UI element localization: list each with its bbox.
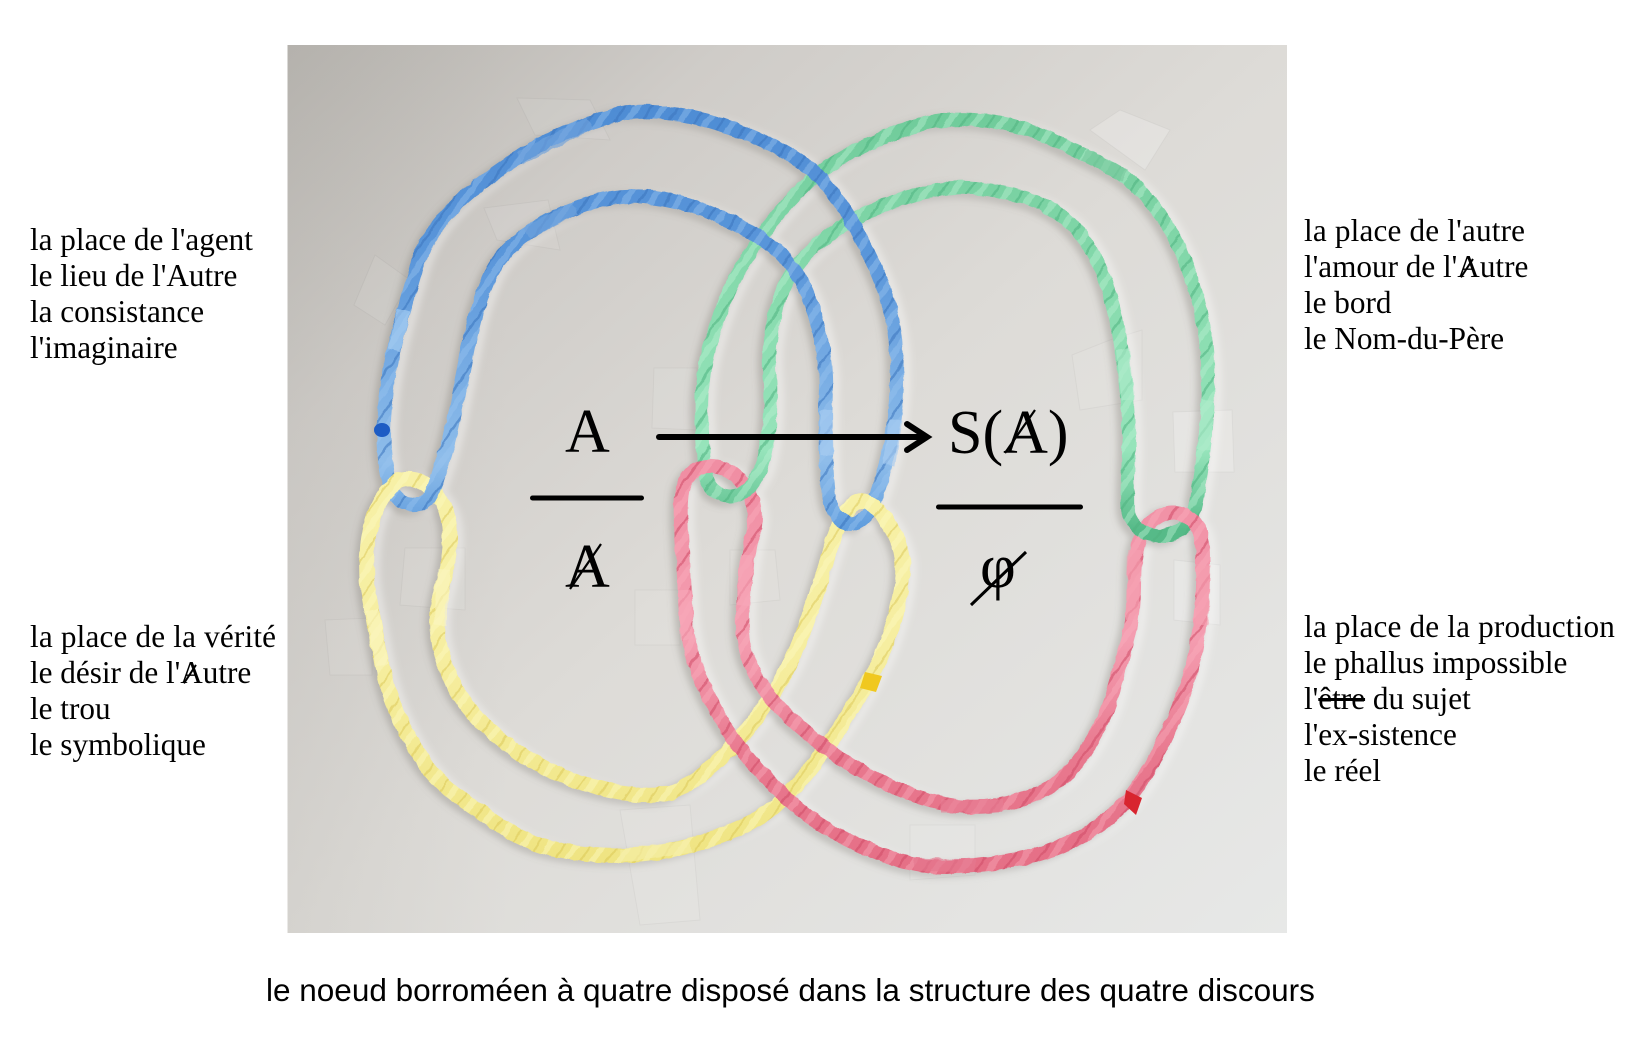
text block: agent: la place de l'agent: [30, 222, 253, 257]
pink rope: la production: [681, 466, 1203, 867]
arrow from A to S(A): [659, 424, 927, 450]
text block: autre: [1304, 213, 1528, 356]
formula: S of barred A: S(A): [948, 399, 1069, 467]
green rope: l'autre: [701, 119, 1208, 536]
text block: agent: l'imaginaire: [30, 330, 178, 365]
text block: production: le réel: [1304, 752, 1381, 788]
text block: autre: la place de l'autre: [1304, 213, 1525, 248]
text block: vérité: A: [180, 655, 203, 690]
text block: production: la place de la production: [1304, 608, 1615, 644]
text block: vérité: le désir de l' utre: [30, 655, 251, 690]
text block: production: l'ex-sistence: [1304, 716, 1457, 752]
taped lighter sections of the ropes: [372, 123, 1208, 866]
text block: production: l'être du sujet: [1304, 680, 1471, 716]
rope shadows: [363, 114, 1215, 870]
text block: autre: A: [1457, 249, 1480, 284]
formula: barred A: A: [565, 533, 610, 601]
links where yellow and pink ropes pass over: [377, 466, 1202, 542]
text block: agent: [30, 222, 253, 365]
text block: vérité: le trou: [30, 691, 111, 726]
fraction bar left: [530, 496, 644, 500]
text block: agent: le lieu de l'Autre: [30, 258, 237, 293]
caption: le noeud borroméen à quatre disposé dans la structure des quatre discours: [266, 972, 1315, 1008]
blue rope: l'agent: [384, 112, 897, 524]
photo background: [288, 45, 1287, 933]
formula: barred phi: φ: [980, 533, 1016, 601]
text block: autre: le Nom-du-Père: [1304, 321, 1504, 356]
text block: autre: l'amour de l' utre: [1304, 249, 1528, 284]
formula: agent A: A: [565, 398, 610, 466]
text block: vérité: la place de la vérité: [30, 619, 276, 654]
adhesive tape pieces on the photo: [325, 98, 1234, 925]
text block: vérité: [30, 619, 276, 762]
text block: vérité: le symbolique: [30, 727, 206, 762]
yellow rope: la vérité: [367, 479, 903, 856]
text block: agent: la consistance: [30, 294, 204, 329]
formula: barred phi: [971, 533, 1026, 605]
text block: autre: le bord: [1304, 285, 1391, 320]
text block: production: [1304, 608, 1615, 788]
fraction bar right: [936, 504, 1083, 510]
rope end marks: [374, 423, 1142, 815]
text block: production: le phallus impossible: [1304, 644, 1567, 680]
